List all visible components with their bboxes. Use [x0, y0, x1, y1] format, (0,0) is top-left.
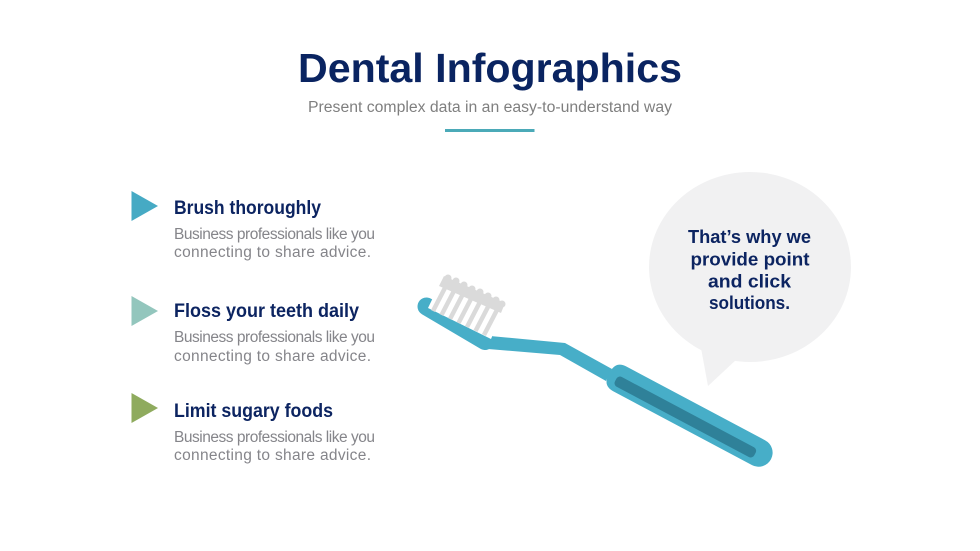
body text: limit sugary foods: Business professionals like you	[174, 429, 375, 446]
icon: olive green triangle	[132, 393, 158, 423]
body text: floss your teeth daily: connecting to share advice.	[174, 348, 371, 365]
callout text: provide point	[690, 248, 810, 270]
body text: brush thoroughly	[174, 226, 375, 261]
icon: pale green triangle	[132, 296, 158, 326]
callout text: That’s why we	[688, 226, 811, 247]
body text: limit sugary foods: connecting to share advice.	[174, 447, 371, 464]
bubble shape	[649, 172, 851, 386]
list item: brush thoroughly	[132, 191, 375, 261]
icon: toothbrush	[426, 274, 778, 472]
toothbrush handle	[603, 361, 778, 472]
handle grip inset	[613, 375, 758, 459]
callout text: solutions.	[709, 292, 790, 313]
list item: limit sugary foods	[132, 393, 375, 464]
body text: floss your teeth daily: Business professionals like you	[174, 329, 375, 346]
body text: brush thoroughly: Business professionals like you	[174, 226, 375, 243]
subtitle: Present complex data in an easy-to-understand way	[308, 99, 672, 116]
body text: floss your teeth daily	[174, 329, 375, 365]
callout text	[688, 226, 811, 313]
list item: floss your teeth daily	[132, 296, 375, 365]
speech bubble callout	[649, 172, 851, 386]
title: Dental Infographics	[298, 45, 682, 91]
bristles	[428, 274, 506, 339]
icon: teal triangle	[132, 191, 158, 221]
heading: limit sugary foods: Limit sugary foods	[174, 401, 333, 422]
body text: limit sugary foods	[174, 429, 375, 464]
toothbrush head	[426, 306, 485, 341]
title underline accent	[445, 129, 534, 132]
body text: brush thoroughly: connecting to share advice.	[174, 244, 371, 261]
heading: floss your teeth daily: Floss your teeth daily	[174, 301, 359, 322]
callout text: and click	[708, 270, 792, 292]
toothbrush neck	[488, 336, 612, 381]
heading: brush thoroughly: Brush thoroughly	[174, 198, 321, 219]
